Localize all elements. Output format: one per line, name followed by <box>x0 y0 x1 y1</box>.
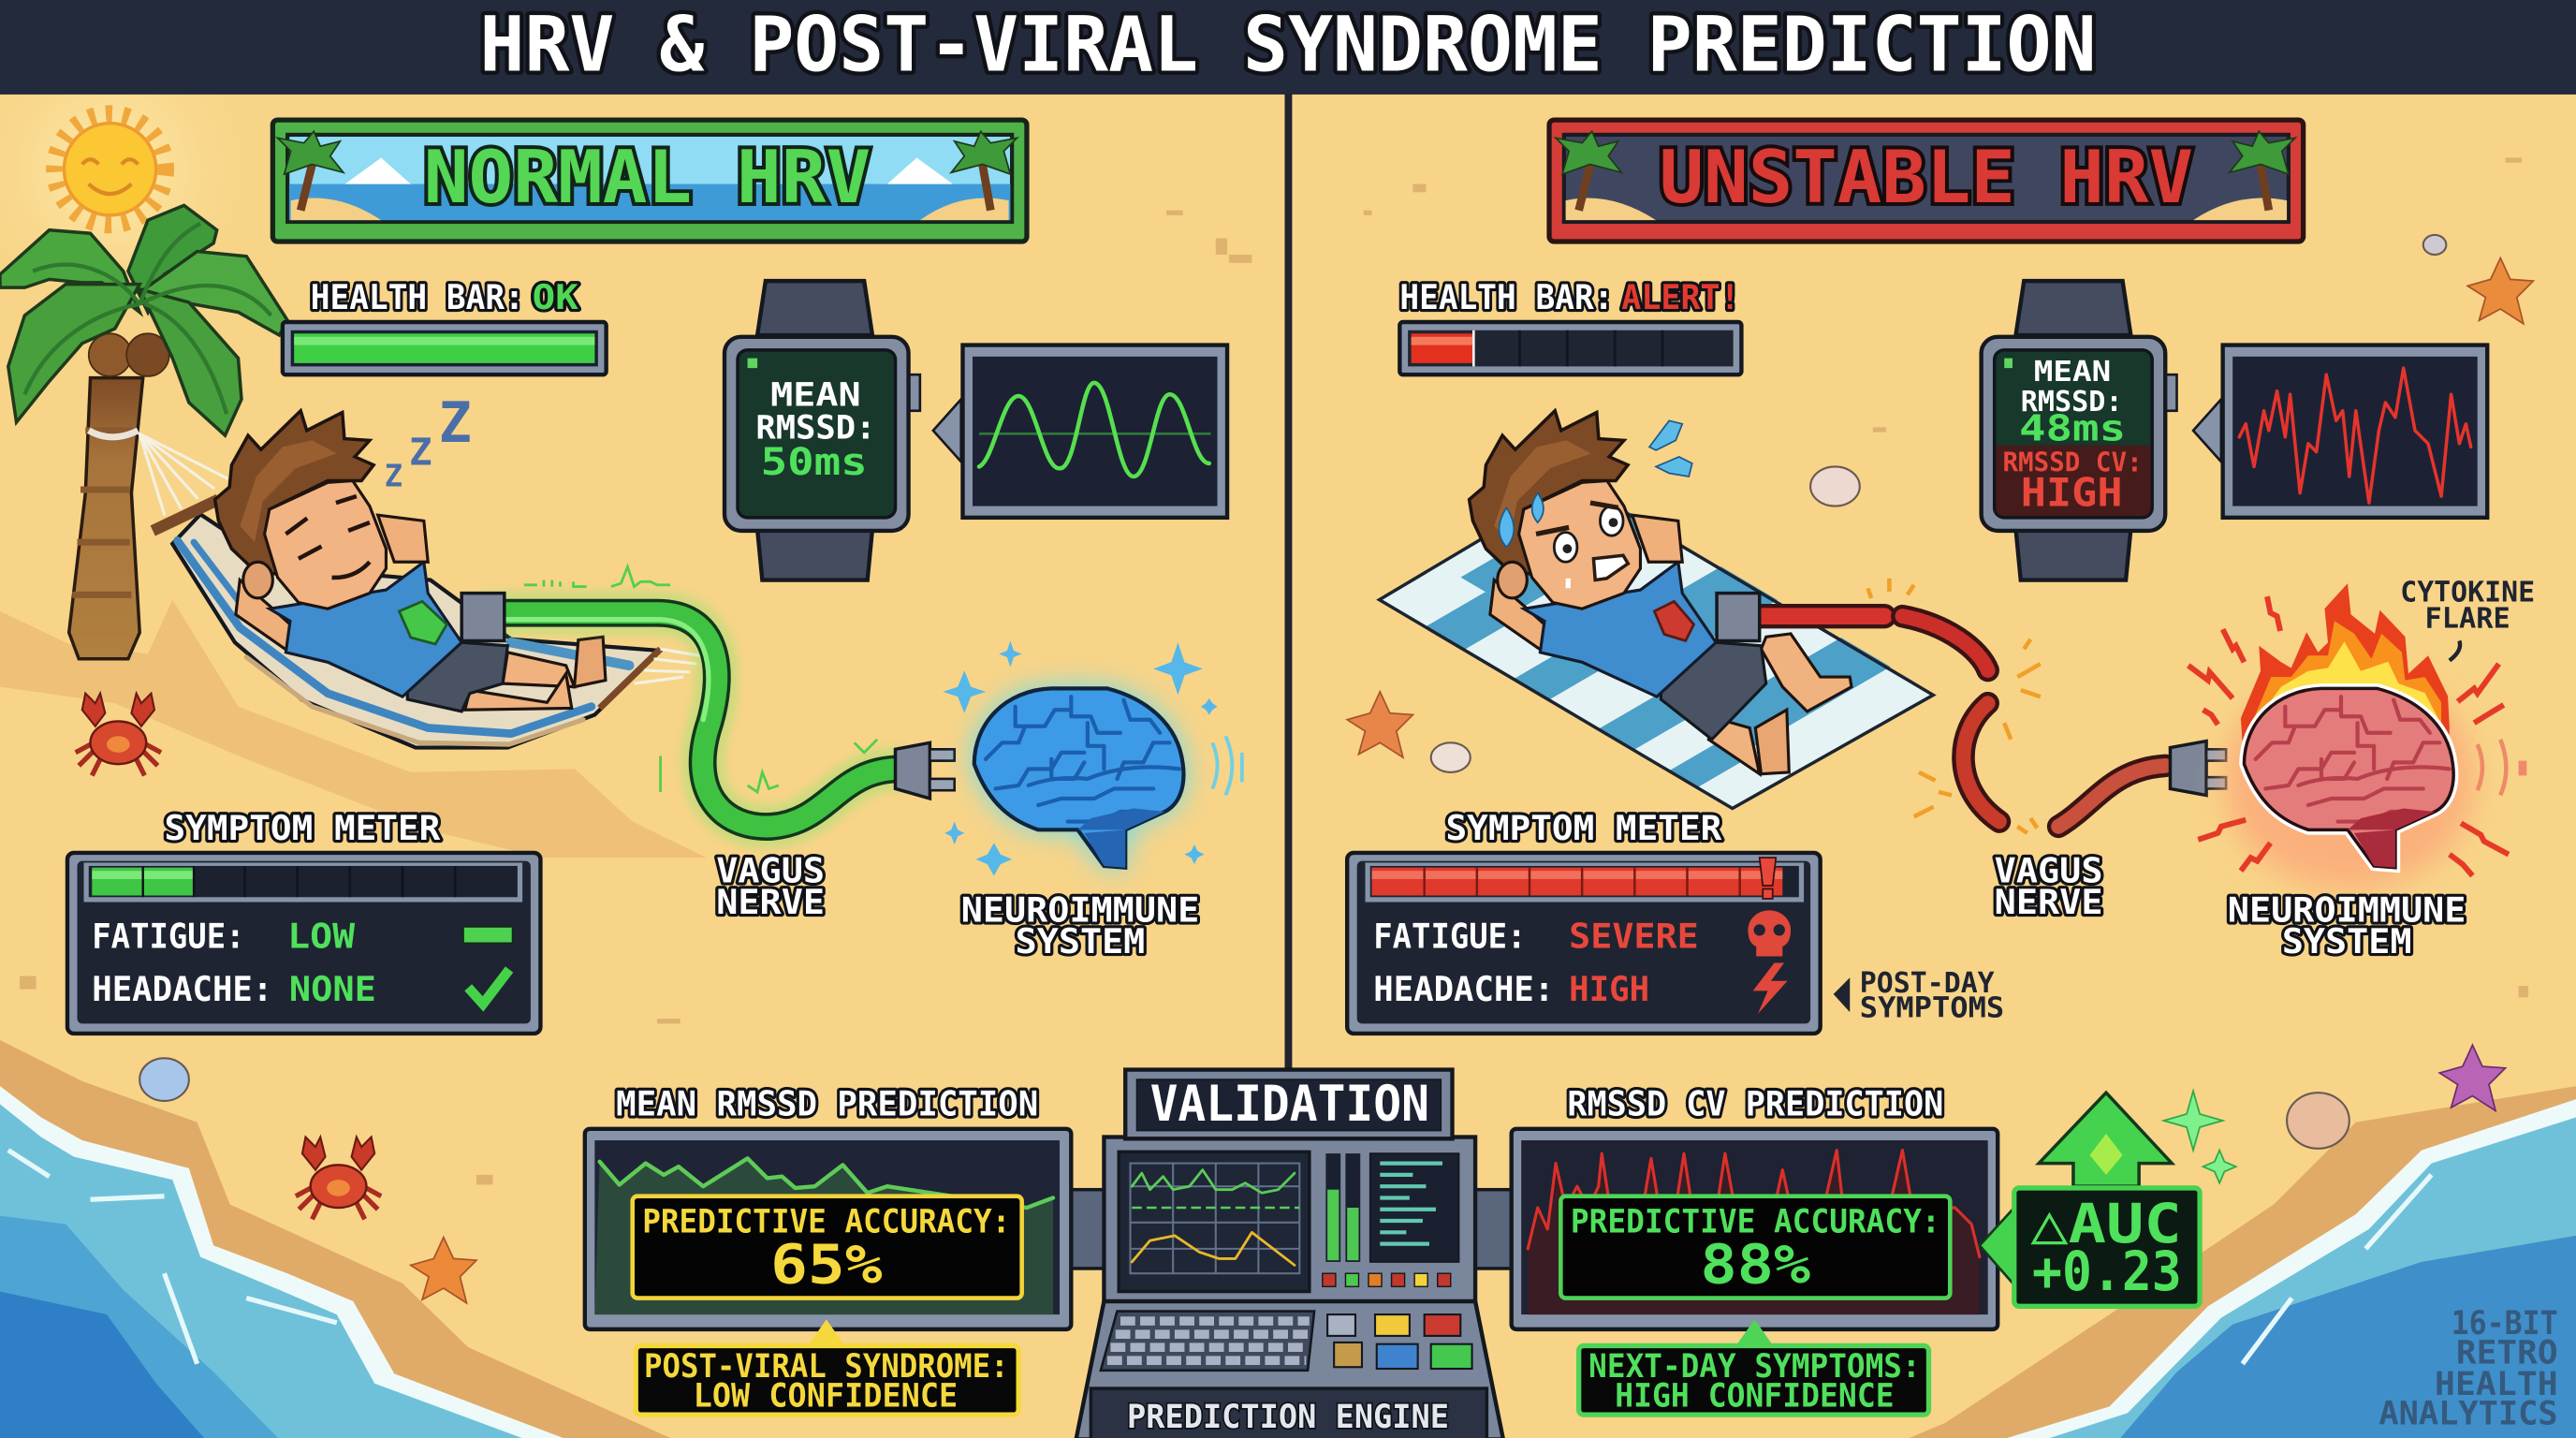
watermark: 16-bit retro health analytics: RETRO <box>2456 1334 2558 1372</box>
ECG monitor: stable wave <box>933 345 1227 518</box>
callout: post-day symptoms: POST-DAY <box>1860 967 1995 1000</box>
panel: mean RMSSD prediction: PREDICTIVE ACCURACY: <box>642 1202 1010 1240</box>
health bar: alert: ALERT! <box>1621 277 1740 317</box>
panel: symptom meter low <box>67 808 540 1034</box>
callout: high confidence <box>1579 1319 1928 1415</box>
smartwatch: unstable: 48ms <box>2019 407 2126 449</box>
panel: RMSSD CV prediction: RMSSD CV PREDICTION <box>1567 1084 1943 1124</box>
icon: zzz: Z <box>409 431 432 475</box>
icon: palm tree <box>0 205 287 659</box>
panel: mean RMSSD prediction <box>585 1084 1071 1329</box>
title bar <box>0 0 2576 95</box>
panel: symptom meter severe: HEADACHE: <box>1373 969 1554 1009</box>
icon: sun <box>54 113 166 225</box>
decoration: starfish <box>411 258 2533 1303</box>
smartwatch: unstable <box>1982 281 2177 580</box>
labels: right nerve and system: SYSTEM <box>2282 921 2411 961</box>
callout: low confidence: POST-VIRAL SYNDROME: <box>644 1347 1009 1386</box>
panel: symptom meter low: FATIGUE: <box>92 917 245 957</box>
panel: RMSSD CV prediction: PREDICTIVE ACCURACY: <box>1571 1202 1940 1240</box>
smartwatch: normal: MEAN <box>770 376 861 415</box>
callout: post-day symptoms <box>1834 967 2004 1024</box>
brain: healthy neuroimmune system <box>943 640 1242 875</box>
smartwatch: unstable: MEAN <box>2034 356 2111 389</box>
towel <box>1380 483 1933 809</box>
labels: right nerve and system: NEUROIMMUNE <box>2228 890 2466 931</box>
icon: zzz: Z <box>439 391 472 456</box>
validation prediction engine computer: PREDICTION ENGINE <box>1127 1398 1449 1436</box>
validation title plate: VALIDATION <box>1150 1076 1429 1133</box>
brain: inflamed neuroimmune system with flames <box>2188 583 2526 889</box>
panel: RMSSD CV prediction: 88% <box>1701 1233 1810 1297</box>
callout: low confidence <box>636 1319 1018 1415</box>
panel: symptom meter low: HEADACHE: <box>92 969 272 1009</box>
decoration: crabs <box>76 694 381 1219</box>
watermark: 16-bit retro health analytics: 16-BIT <box>2452 1304 2558 1343</box>
labels: left nerve and system: VAGUS <box>716 850 825 890</box>
labels: left nerve and system: NERVE <box>716 882 825 922</box>
health bar: alert <box>1399 277 1741 374</box>
panel: symptom meter severe: FATIGUE: <box>1373 917 1526 957</box>
labels: left nerve and system: NEUROIMMUNE <box>961 890 1199 931</box>
validation prediction engine computer <box>1076 1137 1503 1438</box>
label: cytokine flare: CYTOKINE <box>2400 576 2535 609</box>
vagus nerve: severed <box>1717 579 2226 833</box>
labels: right nerve and system <box>1995 850 2466 961</box>
labels: right nerve and system: NERVE <box>1995 882 2103 922</box>
banner: normal HRV: NORMAL HRV <box>424 136 871 220</box>
callout: low confidence: LOW CONFIDENCE <box>694 1376 958 1415</box>
smartwatch: normal <box>724 281 920 580</box>
decoration: shells <box>139 235 2446 1149</box>
panel: symptom meter low: NONE <box>289 969 376 1009</box>
callout: delta AUC with up arrow: +0.23 <box>2032 1240 2182 1303</box>
callout: high confidence: NEXT-DAY SYMPTOMS: <box>1588 1347 1921 1386</box>
connector pipes <box>1071 1190 1513 1269</box>
callout: post-day symptoms: SYMPTOMS <box>1860 991 2004 1024</box>
icon: zzz <box>385 391 472 494</box>
watermark: 16-bit retro health analytics <box>2378 1304 2558 1433</box>
labels: left nerve and system <box>716 850 1199 961</box>
labels: left nerve and system: SYSTEM <box>1016 921 1145 961</box>
panel: mean RMSSD prediction: MEAN RMSSD PREDICTION <box>616 1084 1038 1124</box>
shoreline: left ocean <box>0 1040 674 1438</box>
character: resting man <box>215 411 606 712</box>
watermark: 16-bit retro health analytics: ANALYTICS <box>2378 1395 2558 1433</box>
smartwatch: normal: 50ms <box>761 440 868 484</box>
character: distressed man <box>1470 411 1852 774</box>
callout: high confidence: HIGH CONFIDENCE <box>1615 1376 1895 1415</box>
smartwatch: normal: RMSSD: <box>755 409 875 448</box>
label: cytokine flare: FLARE <box>2425 602 2510 635</box>
label: cytokine flare <box>2400 576 2535 661</box>
smartwatch: unstable: RMSSD: <box>2021 386 2123 418</box>
vagus nerve: intact <box>399 567 955 827</box>
health bar: OK <box>283 277 607 374</box>
shoreline: right ocean <box>1906 1086 2576 1438</box>
health bar: OK: HEALTH BAR: <box>311 277 524 317</box>
panel: mean RMSSD prediction: 65% <box>770 1233 883 1297</box>
banner: unstable HRV <box>1549 120 2304 242</box>
center divider <box>1284 94 1292 1070</box>
panel: symptom meter severe <box>1347 808 1821 1034</box>
title bar: HRV & POST-VIRAL SYNDROME PREDICTION <box>479 1 2097 89</box>
health bar: OK: OK <box>533 277 579 317</box>
smartwatch: unstable: HIGH <box>2021 470 2123 516</box>
callout: delta AUC with up arrow <box>1980 1091 2236 1306</box>
panel: symptom meter severe: SYMPTOM METER <box>1445 808 1722 848</box>
smartwatch: unstable: RMSSD CV: <box>2002 448 2143 478</box>
ECG monitor: erratic wave <box>2193 345 2487 518</box>
health bar: alert: HEALTH BAR: <box>1399 277 1614 317</box>
banner: unstable HRV: UNSTABLE HRV <box>1660 136 2193 220</box>
panel: symptom meter low: SYMPTOM METER <box>165 808 441 848</box>
callout: delta AUC with up arrow: △AUC <box>2030 1192 2182 1255</box>
watermark: 16-bit retro health analytics: HEALTH <box>2435 1365 2558 1403</box>
panel: symptom meter low: LOW <box>287 917 356 957</box>
icon: zzz: Z <box>385 458 402 494</box>
labels: right nerve and system: VAGUS <box>1995 850 2103 890</box>
hammock <box>139 433 700 748</box>
banner: normal HRV <box>272 120 1027 242</box>
panel: RMSSD CV prediction <box>1512 1084 1998 1329</box>
panel: symptom meter severe: SEVERE <box>1569 917 1699 957</box>
panel: symptom meter severe: HIGH <box>1569 969 1649 1009</box>
